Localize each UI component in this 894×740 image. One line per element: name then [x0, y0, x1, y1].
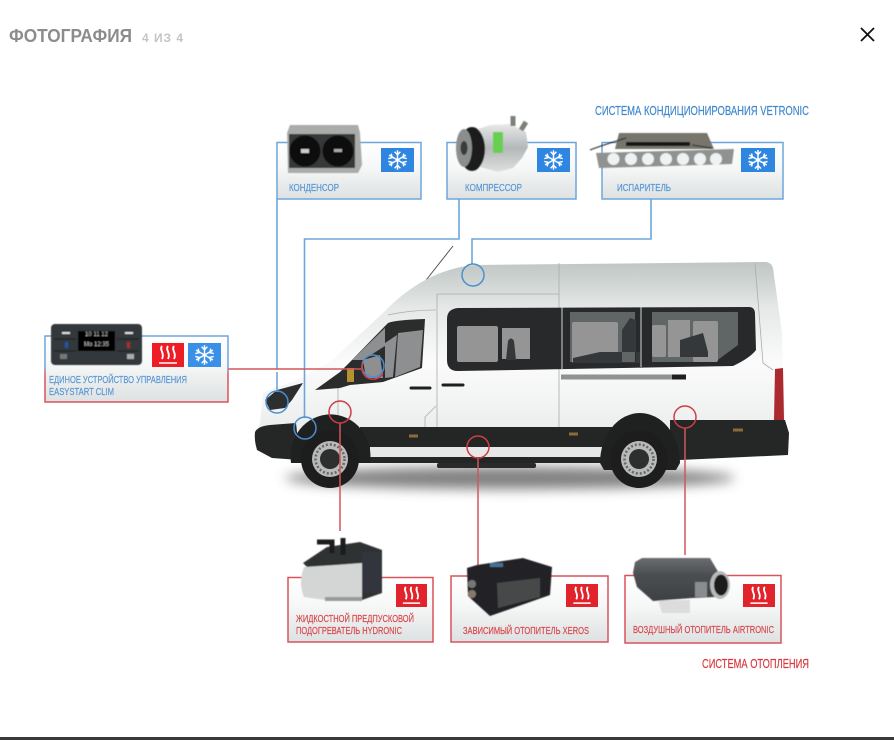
cab window	[315, 319, 425, 390]
mirror	[347, 368, 354, 382]
van illustration	[255, 246, 789, 489]
panel: конденсор	[277, 125, 421, 199]
panel: испаритель	[590, 133, 783, 199]
window pillars	[562, 307, 641, 370]
white sill strip	[370, 447, 602, 457]
close icon	[861, 28, 874, 41]
van body	[256, 262, 785, 445]
panel: airtronic	[625, 558, 781, 643]
product: condenser	[287, 125, 362, 173]
product: hydronic heater	[301, 538, 382, 600]
panel: xeros	[451, 558, 608, 642]
headlight	[265, 383, 303, 410]
red system heading: СИСТЕМА ОТОПЛЕНИЯ	[702, 656, 809, 671]
icon: heat	[152, 343, 184, 367]
icon: heat	[743, 584, 775, 607]
icon: snowflake	[381, 148, 414, 172]
front bumper	[255, 423, 300, 460]
panel box	[451, 576, 608, 642]
ground shadow	[285, 467, 735, 489]
label: ЗАВИСИМЫЙ ОТОПИТЕЛЬ XEROS	[463, 624, 589, 637]
photo counter: 4 ИЗ 4	[142, 31, 183, 45]
product: evaporator	[590, 133, 734, 168]
label: ВОЗДУШНЫЙ ОТОПИТЕЛЬ AIRTRONIC	[633, 623, 774, 636]
product: control unit	[51, 324, 142, 365]
panel box	[277, 142, 421, 199]
panel box	[602, 142, 783, 199]
side step	[437, 463, 536, 468]
rear glass tint	[570, 312, 738, 362]
product: airtronic heater	[633, 558, 730, 613]
rear wheel arch	[600, 413, 680, 470]
panel: единое устройство управления	[45, 324, 228, 402]
front wheel arch	[290, 414, 370, 463]
blue system heading: СИСТЕМА КОНДИЦИОНИРОВАНИЯ VETRONIC	[595, 103, 809, 118]
passenger window panes	[457, 320, 718, 363]
front wheel	[301, 430, 359, 488]
icon: heat	[396, 584, 427, 607]
product: control unit: 10 11 12	[85, 332, 109, 338]
label: ИСПАРИТЕЛЬ	[617, 183, 671, 194]
header title: ФОТОГРАФИЯ: ФОТОГРАФИЯ	[9, 26, 132, 46]
panel: компрессор	[447, 116, 576, 199]
bottom edge bar	[0, 737, 894, 740]
product: xeros heater	[467, 558, 552, 616]
seat silhouettes	[506, 318, 708, 363]
rear bumper	[670, 420, 789, 460]
rear wheel	[610, 430, 668, 488]
icon: snowflake	[741, 148, 775, 172]
blue marker circles	[266, 264, 484, 439]
amber side markers	[409, 430, 743, 436]
red marker circles	[329, 363, 696, 458]
panel box	[447, 142, 576, 199]
icon: snowflake	[537, 148, 570, 172]
door seams	[338, 263, 773, 447]
product: control unit: Mo 12:35	[84, 342, 110, 348]
panel box	[625, 576, 781, 643]
blue connector lines	[277, 199, 651, 418]
panel box	[288, 578, 433, 642]
label line 2: EASYSTART CLIM	[49, 386, 114, 398]
tail light	[774, 368, 784, 420]
product: compressor	[456, 116, 528, 172]
panel: hydronic	[288, 538, 433, 642]
panel box	[45, 336, 228, 402]
cab window panes	[352, 328, 423, 378]
antenna	[423, 246, 453, 284]
icon: snowflake	[188, 343, 221, 367]
door handles	[411, 385, 463, 388]
passenger window band	[447, 307, 756, 371]
label: ЖИДКОСТНОЙ ПРЕДПУСКОВОЙ	[296, 612, 414, 625]
label: ЕДИНОЕ УСТРОЙСТВО УПРАВЛЕНИЯ	[49, 373, 187, 386]
label line 2: ПОДОГРЕВАТЕЛЬ HYDRONIC	[296, 625, 402, 637]
label: КОМПРЕССОР	[465, 183, 522, 194]
icon: heat	[566, 584, 598, 607]
side skirt	[360, 427, 612, 463]
red connector lines	[228, 369, 685, 565]
sliding door rail	[561, 374, 686, 380]
label: КОНДЕНСОР	[289, 183, 339, 194]
